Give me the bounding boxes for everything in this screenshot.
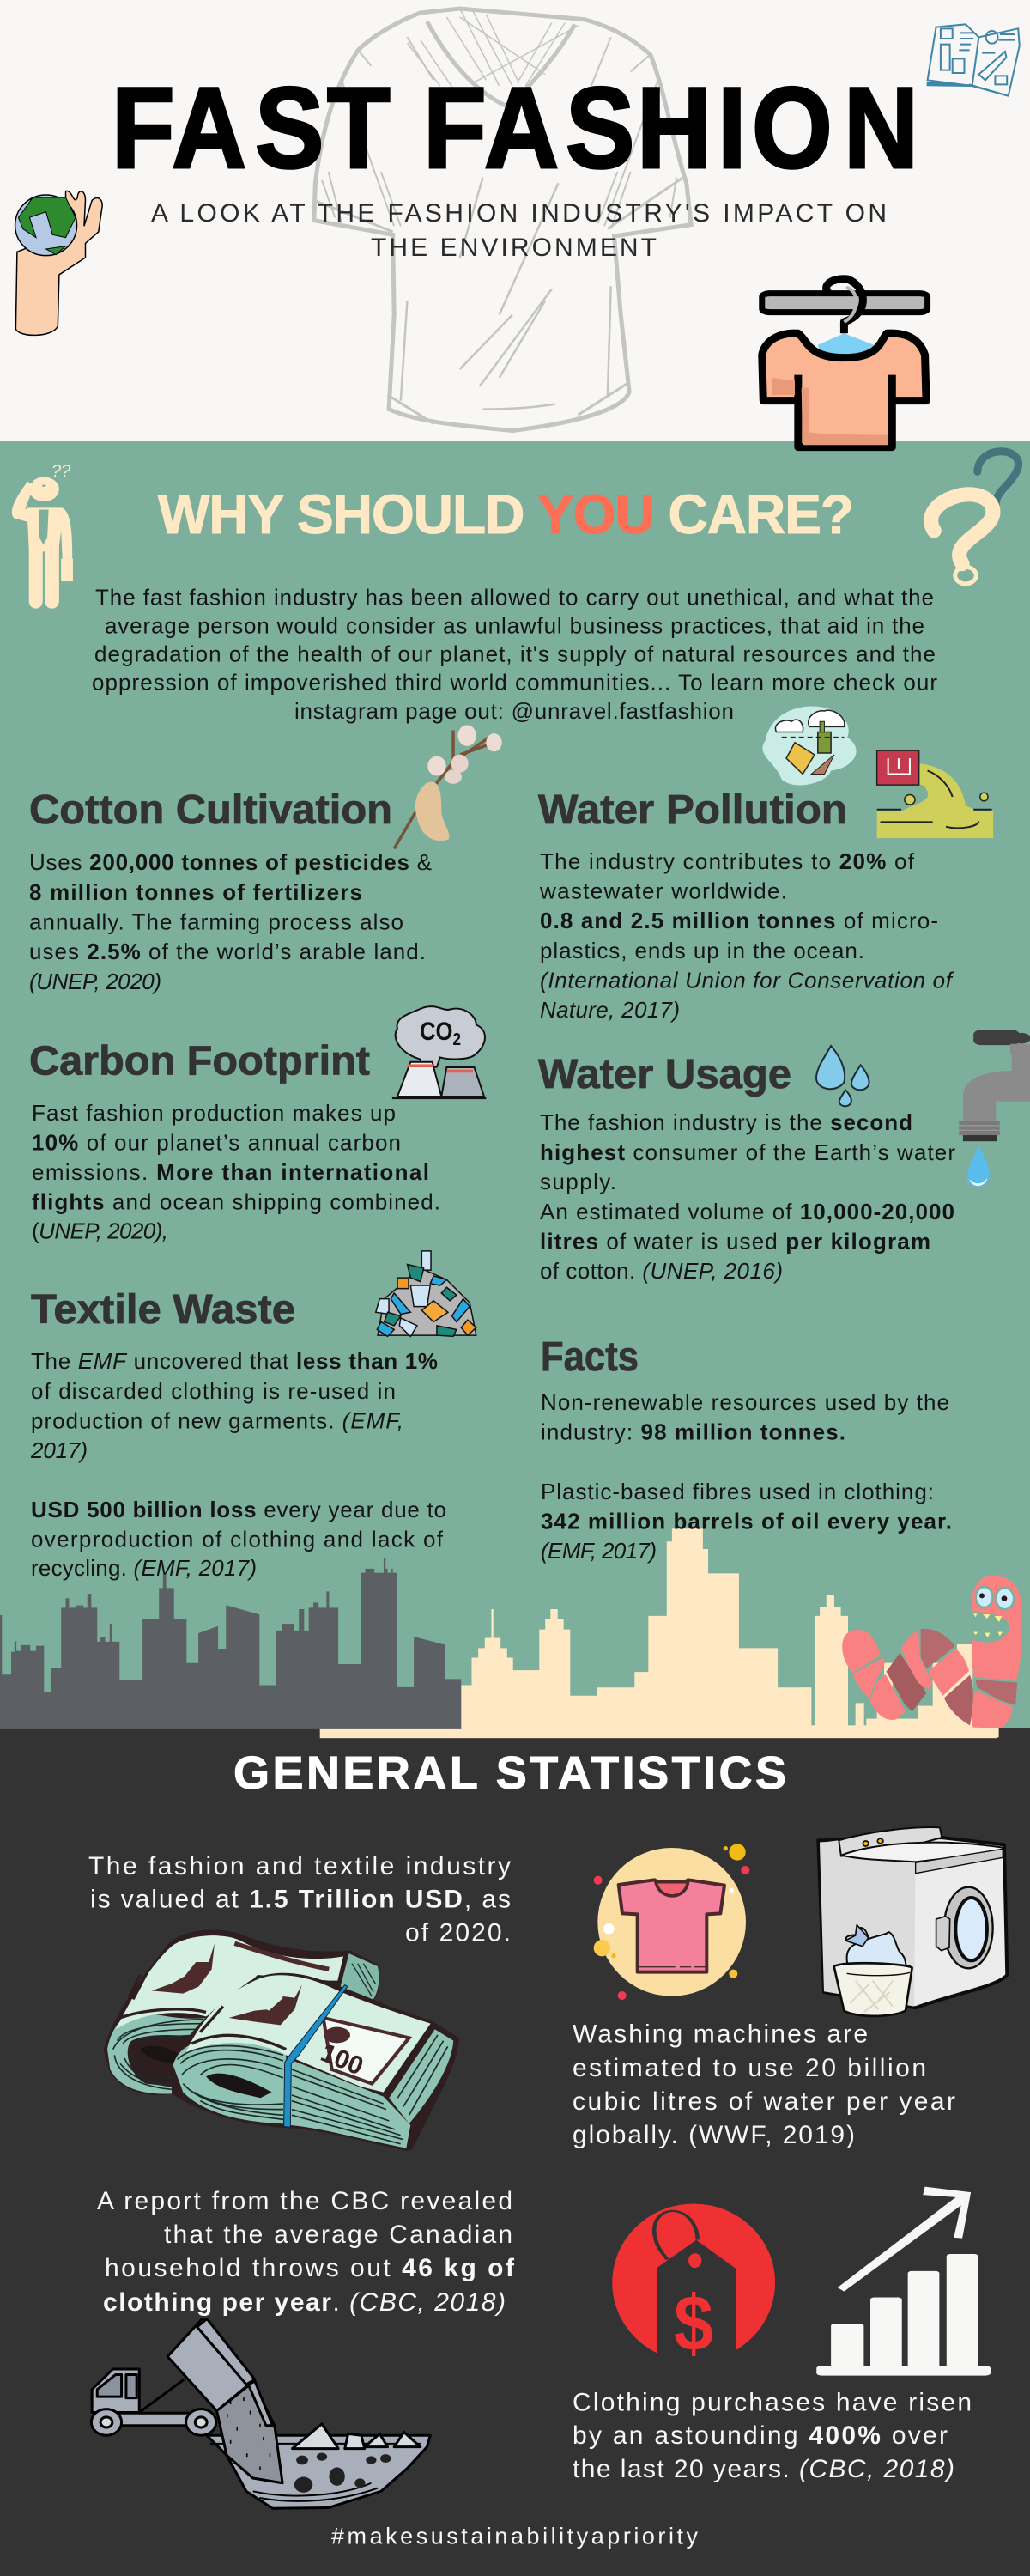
heading: cotton cultivation: Cotton Cultivation	[29, 787, 392, 833]
text: carbon footprint: flights and ocean shipping combined.	[32, 1188, 440, 1214]
title: FAST FASHION	[112, 64, 918, 192]
text: carbon footprint	[32, 1100, 440, 1243]
text: textile waste: of discarded clothing is re-used in	[31, 1378, 396, 1404]
text: CBC report	[97, 2187, 515, 2317]
text: water usage: litres of water is used per kilogram	[540, 1228, 930, 1254]
heading: general statistics: GENERAL STATISTICS	[233, 1747, 786, 1799]
text: textile waste: overproduction of clothing and lack of	[31, 1527, 444, 1552]
text: water usage: An estimated volume of 10,000-20,000	[540, 1199, 954, 1224]
text: cotton cultivation: (UNEP, 2020)	[29, 969, 161, 994]
text: CBC report: household throws out 46 kg of	[105, 2254, 515, 2282]
icon label: CO2: CO	[420, 1018, 458, 1046]
text: textile waste: USD 500 billion loss every year due to	[31, 1497, 446, 1522]
text: washing machines: cubic litres of water per year	[573, 2087, 955, 2116]
icon: large question mark	[931, 452, 1019, 584]
illustration: pollution worm	[798, 1575, 1021, 1737]
text: water pollution: 0.8 and 2.5 million tonnes of micro-	[540, 908, 938, 933]
text: water pollution	[539, 848, 954, 1023]
text: washing machines: estimated to use 20 billion	[573, 2054, 926, 2082]
icon: plastic waste pile	[376, 1251, 476, 1336]
text: cotton cultivation: Uses 200,000 tonnes of pesticides &	[29, 849, 432, 875]
icon: ocean pollution	[762, 706, 857, 785]
text: industry value	[88, 1852, 511, 1947]
text: water usage: The fashion industry is the second	[540, 1109, 912, 1135]
icon: pink t-shirt in circle	[594, 1844, 749, 2000]
icon: dump truck at landfill	[91, 2318, 430, 2508]
text: textile waste	[30, 1348, 446, 1581]
text: CBC report: that the average Canadian	[164, 2221, 512, 2249]
text: water pollution: (International Union for Conservation of	[540, 967, 954, 993]
intro paragraph: oppression of impoverished third world communities... To learn more check our	[92, 670, 937, 696]
text: washing machines: Washing machines are	[573, 2020, 868, 2049]
subtitle: A LOOK AT THE FASHION INDUSTRY'S IMPACT ON	[151, 199, 887, 228]
text: facts: industry: 98 million tonnes.	[541, 1419, 845, 1444]
text: textile waste: recycling. (EMF, 2017)	[31, 1555, 257, 1581]
text: cotton cultivation: 8 million tonnes of fertilizers	[29, 879, 362, 905]
icon: price tag with dollar	[612, 2203, 775, 2365]
icon: washing machine and basket	[818, 1827, 1007, 2016]
text: washing machines	[573, 2020, 955, 2149]
icon: open magazine	[928, 24, 1020, 96]
icon: water drops	[816, 1046, 869, 1106]
text: water pollution: The industry contributes to 20% of	[540, 848, 915, 874]
text: water usage: highest consumer of the Earth’s water	[540, 1139, 955, 1165]
text: facts: 342 million barrels of oil every year.	[541, 1508, 952, 1534]
text: cotton cultivation: uses 2.5% of the world’s arable land.	[29, 939, 426, 964]
text: water pollution: Nature, 2017)	[540, 997, 680, 1023]
text: industry value: is valued at 1.5 Trillion USD, as	[90, 1886, 511, 1913]
icon: bundles of cash: 100	[317, 2038, 367, 2081]
panel: general statistics background	[0, 1728, 1030, 2576]
text: textile waste: The EMF uncovered that less than 1%	[31, 1348, 438, 1374]
heading: facts: Facts	[541, 1334, 639, 1380]
text: carbon footprint: 10% of our planet’s annual carbon	[32, 1130, 401, 1156]
icon: hand holding globe	[15, 191, 102, 335]
icon: rising bar chart with arrow	[816, 2187, 991, 2376]
question marks small: ??	[52, 462, 71, 481]
intro paragraph: degradation of the health of our planet, it's supply of natural resources and the	[94, 641, 936, 666]
intro paragraph	[92, 584, 937, 724]
icon: bundles of cash	[104, 1929, 459, 2151]
text: industry value: The fashion and textile industry	[88, 1852, 511, 1880]
icon: cotton branch in hand	[394, 725, 502, 848]
text: textile waste: production of new garments. (EMF,	[31, 1408, 403, 1434]
intro paragraph: average person would consider as unlawful business practices, that aid in the	[105, 613, 924, 639]
icon: sketched t-shirt	[314, 9, 691, 431]
illustration: grey city skyline	[0, 1558, 461, 1729]
text: facts: (EMF, 2017)	[541, 1538, 657, 1564]
text: water usage: of cotton. (UNEP, 2016)	[540, 1258, 783, 1284]
text: CBC report: clothing per year. (CBC, 2018)	[103, 2288, 506, 2317]
icon: thinking man	[12, 477, 73, 609]
panel: why should you care background	[0, 441, 1030, 1729]
icon label: dollar sign: $	[674, 2280, 713, 2367]
hashtag: #makesustainabilityapriority	[331, 2523, 699, 2549]
panel: header background	[0, 0, 1030, 442]
text: carbon footprint: Fast fashion production makes up	[32, 1100, 396, 1126]
icon: pipe discharge	[877, 750, 993, 838]
heading: water pollution: Water Pollution	[538, 787, 847, 833]
text: textile waste: 2017)	[30, 1437, 88, 1463]
icon: shirt on hanger	[762, 279, 928, 447]
illustration: cream city skyline	[320, 1528, 997, 1738]
heading: water usage: Water Usage	[538, 1052, 791, 1097]
text: facts: Plastic-based fibres used in clothing:	[541, 1479, 934, 1504]
subtitle: THE ENVIRONMENT	[371, 234, 657, 262]
text: washing machines: globally. (WWF, 2019)	[573, 2121, 855, 2149]
text: carbon footprint: (UNEP, 2020),	[32, 1218, 168, 1243]
text: cotton cultivation	[29, 849, 432, 994]
text: facts	[541, 1389, 952, 1564]
text: water usage	[540, 1109, 955, 1284]
icon: tap with drop	[959, 1030, 1030, 1187]
text: water pollution: wastewater worldwide.	[539, 878, 787, 903]
text: CBC report: A report from the CBC revealed	[97, 2187, 512, 2215]
text: cotton cultivation: annually. The farming process also	[29, 908, 403, 934]
text: carbon footprint: emissions. More than international	[32, 1159, 429, 1185]
heading: why should you care: WHY SHOULD YOU CARE?	[158, 483, 854, 545]
intro paragraph: The fast fashion industry has been allowed to carry out unethical, and what the	[95, 584, 934, 610]
text: clothing purchases: Clothing purchases have risen	[573, 2389, 972, 2416]
text: clothing purchases	[573, 2389, 972, 2483]
subtitle	[151, 199, 887, 262]
text: clothing purchases: by an astounding 400% over	[573, 2421, 948, 2450]
heading: textile waste: Textile Waste	[31, 1287, 295, 1333]
icon label: CO2: 2	[452, 1030, 461, 1049]
heading: carbon footprint: Carbon Footprint	[29, 1039, 370, 1084]
text: water pollution: plastics, ends up in the ocean.	[540, 938, 864, 963]
text: water usage: supply.	[540, 1169, 616, 1194]
text: facts: Non-renewable resources used by the	[541, 1389, 949, 1415]
icon: CO2 factory	[392, 1006, 486, 1099]
intro paragraph: instagram page out: @unravel.fastfashion	[294, 698, 734, 724]
text: industry value: of 2020.	[405, 1918, 511, 1947]
text: clothing purchases: the last 20 years. (CBC, 2018)	[573, 2455, 954, 2483]
